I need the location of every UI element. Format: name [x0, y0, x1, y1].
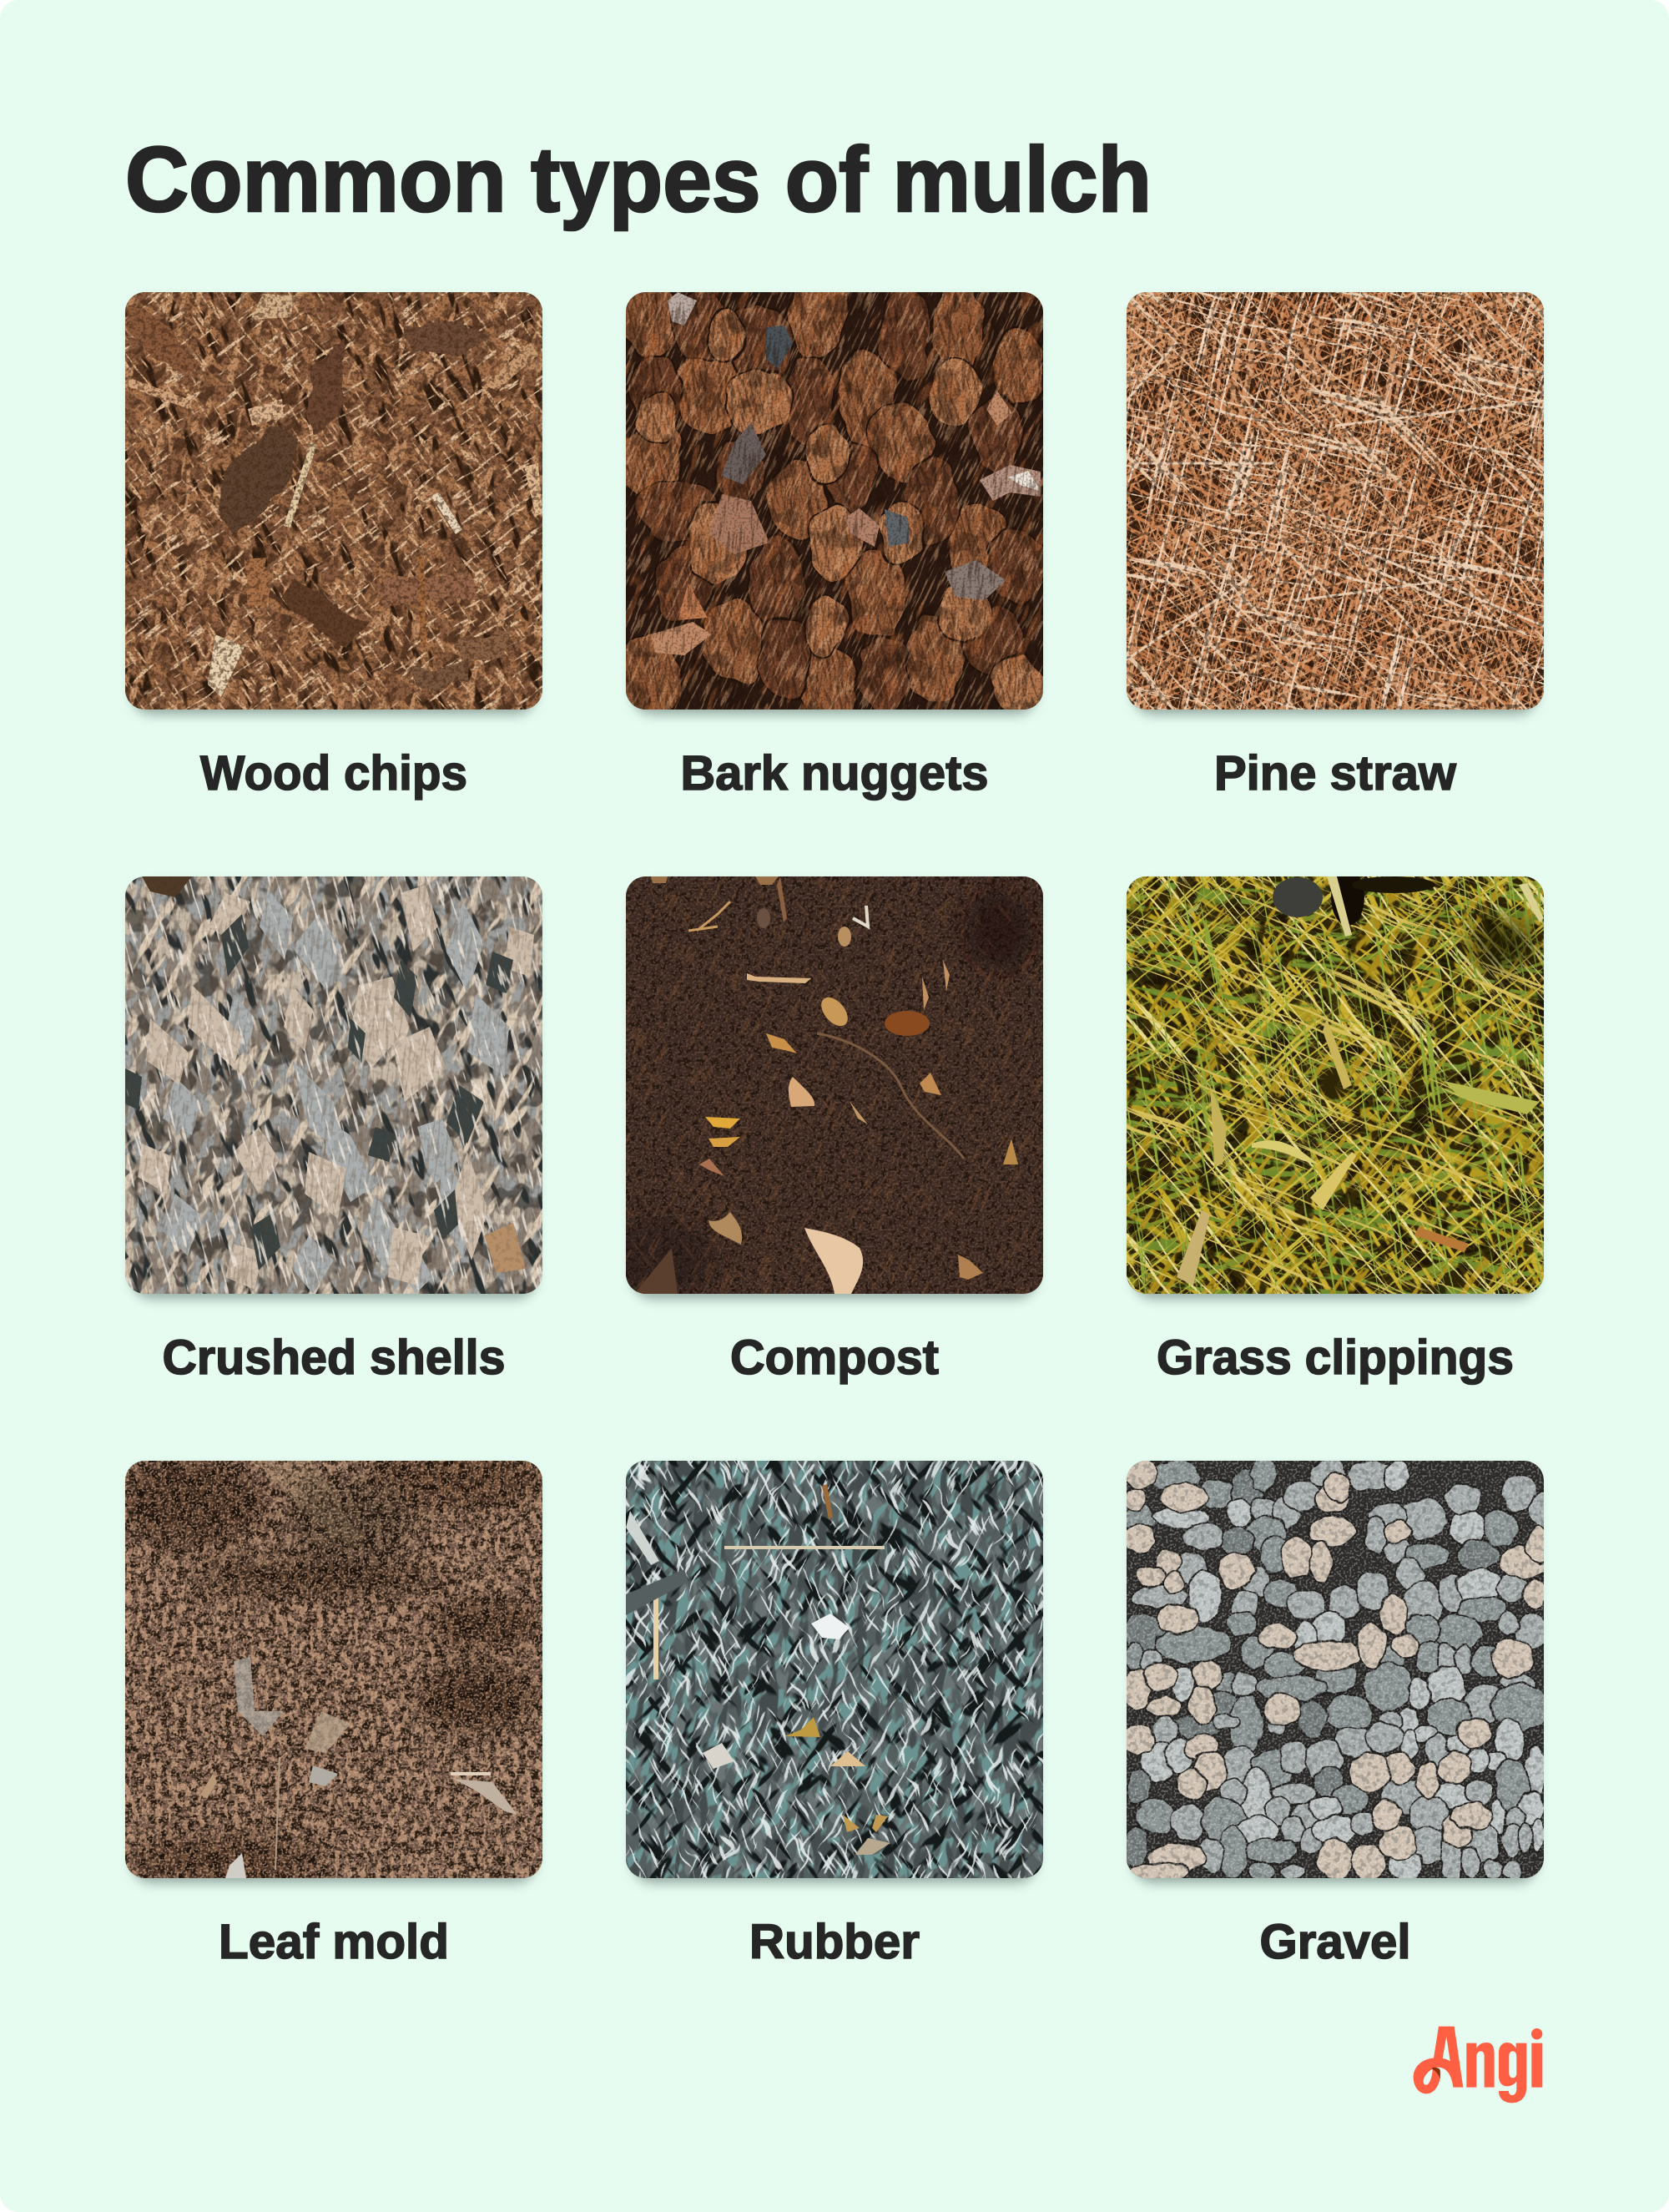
- label: grass clippings: Grass clippings: [1157, 1331, 1514, 1385]
- panel: crushed shells: [0, 674, 744, 1496]
- photo: bark nuggets: [626, 292, 1043, 721]
- label: wood chips: Wood chips: [200, 746, 467, 800]
- label: rubber: Rubber: [749, 1915, 920, 1969]
- photo: leaf mold: [33, 1369, 634, 1970]
- photo: crushed shells: [0, 674, 744, 1496]
- panel: gravel: [925, 1259, 1669, 2080]
- label: compost: Compost: [730, 1331, 939, 1385]
- panel: rubber: [411, 1246, 1258, 2093]
- photo: compost: [411, 662, 1258, 1508]
- photo: gravel: [925, 1259, 1669, 2080]
- label: crushed shells: Crushed shells: [162, 1331, 506, 1385]
- panel: grass clippings: [912, 662, 1669, 1508]
- photo: wood chips: [125, 292, 542, 721]
- title: Common types of mulch: [125, 129, 1152, 231]
- photo: rubber: [411, 1246, 1258, 2093]
- panel: leaf mold: [33, 1369, 634, 1970]
- label: gravel: Gravel: [1260, 1915, 1410, 1969]
- photo: pine straw: [910, 76, 1669, 926]
- label: pine straw: Pine straw: [1214, 746, 1457, 800]
- label: leaf mold: Leaf mold: [219, 1915, 449, 1969]
- photo: grass clippings: [912, 662, 1669, 1508]
- panel: wood chips: [125, 292, 542, 800]
- logo: Angi: [1414, 2027, 1542, 2103]
- panel: bark nuggets: [626, 292, 1043, 801]
- panel: compost: [411, 662, 1258, 1508]
- panel: pine straw: [1127, 292, 1544, 791]
- label: bark nuggets: Bark nuggets: [681, 746, 988, 800]
